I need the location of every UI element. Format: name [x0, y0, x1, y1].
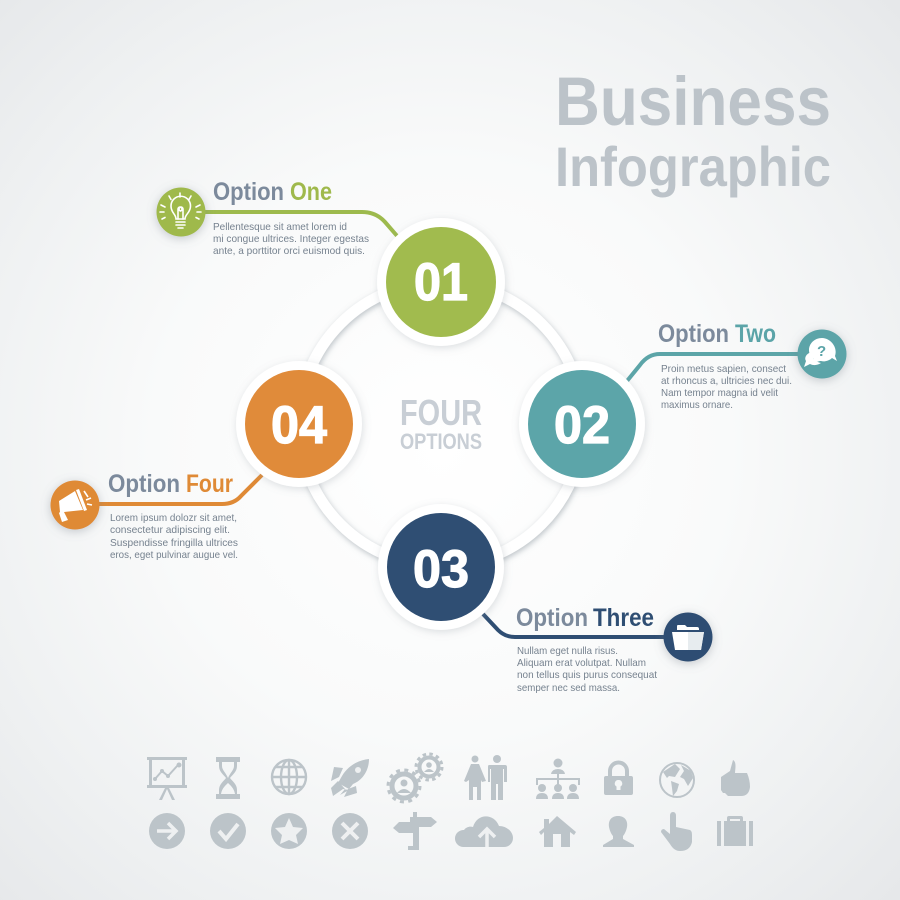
text: option two: Nam tempor magna id velit: [661, 387, 778, 399]
number badge 04: [236, 361, 362, 487]
center label: four options: FOUR: [400, 392, 482, 433]
panel: option four: [50, 361, 362, 561]
text: option four: [110, 512, 238, 561]
heading: option two: Option: [658, 320, 729, 348]
text: option one: ante, a porttitor orci euismod quis.: [213, 245, 365, 257]
icon: house: [539, 816, 576, 847]
icon: briefcase: [717, 816, 753, 846]
center label: four options: OPTIONS: [400, 429, 482, 454]
icon: world: [660, 763, 694, 797]
text: option four: Lorem ipsum dolozr sit amet,: [110, 512, 237, 524]
connector: option three: [483, 614, 688, 637]
icon: couple: [464, 755, 507, 800]
heading: option two: Two: [735, 320, 776, 348]
text: option one: mi congue ultrices. Integer egestas: [213, 233, 369, 245]
number badge 03: 03: [413, 540, 469, 599]
text: option two: [661, 363, 792, 411]
connector: option one: [181, 212, 398, 237]
heading: option four: Four: [186, 470, 233, 498]
number badge 01: 01: [414, 253, 468, 312]
heading: option one: Option: [213, 178, 284, 206]
text: option two: at rhoncus a, ultricies nec dui.: [661, 375, 792, 387]
icon: star circle: [271, 813, 307, 849]
icon: cloud upload: [455, 816, 513, 847]
text: option two: maximus ornare.: [661, 399, 733, 411]
icon row 1: [147, 754, 750, 802]
icon: person: [603, 816, 634, 847]
text: option three: [517, 645, 657, 694]
text: option four: consectetur adipiscing elit.: [110, 524, 230, 536]
text: option four: eros, eget pulvinar augue vel.: [110, 549, 238, 561]
text: option one: [213, 221, 369, 257]
panel: option two: [519, 320, 846, 487]
icon: gears with people: [388, 754, 442, 802]
text: option four: Suspendisse fringilla ultrices: [110, 537, 238, 549]
text: option two: Proin metus sapien, consect: [661, 363, 786, 375]
number badge 02: 02: [554, 396, 610, 455]
icon: hourglass: [216, 757, 240, 799]
icon: arrow circle: [149, 813, 185, 849]
title: Infographic: [555, 135, 831, 198]
title: [555, 63, 831, 198]
heading: option one: One: [290, 178, 332, 206]
icon: megaphone: [50, 480, 100, 530]
title: Business: [555, 63, 831, 140]
text: option three: non tellus quis purus consequat: [517, 669, 657, 681]
heading: option four: Option: [108, 470, 180, 498]
central ring: [299, 282, 583, 566]
icon: light bulb: [156, 188, 206, 236]
icon: org chart: [536, 758, 580, 799]
number badge 01: [377, 218, 505, 346]
icon: padlock: [604, 760, 633, 795]
icon: speech bubbles: ?: [817, 343, 826, 360]
icon: pointing hand: [661, 812, 692, 851]
center label: four options: [400, 392, 482, 454]
heading: option three: Option: [516, 604, 588, 632]
icon: speech bubbles: [798, 330, 846, 378]
icon: rocket: [331, 759, 369, 797]
heading: option three: Three: [593, 604, 654, 632]
number badge 02: [519, 361, 645, 487]
connector: option four: [75, 475, 262, 504]
connector: option two: [627, 354, 822, 381]
icon: check circle: [210, 813, 246, 849]
number badge 04: 04: [271, 396, 327, 455]
panel: option one: [156, 178, 505, 346]
text: option three: Aliquam erat volutpat. Nullam: [517, 657, 646, 669]
icon: cross circle: [332, 813, 368, 849]
icon: presentation board: [147, 757, 187, 800]
icon: thumbs up: [721, 760, 750, 796]
text: option three: Nullam eget nulla risus.: [517, 645, 618, 657]
icon row 2: [149, 812, 753, 851]
icon: folder: [664, 612, 712, 662]
text: option three: semper nec sed massa.: [517, 682, 620, 694]
panel: option three: [378, 504, 712, 694]
text: option one: Pellentesque sit amet lorem id: [213, 221, 347, 233]
icon: globe grid: [272, 760, 306, 794]
number badge 03: [378, 504, 504, 630]
icon: signpost: [393, 812, 437, 850]
